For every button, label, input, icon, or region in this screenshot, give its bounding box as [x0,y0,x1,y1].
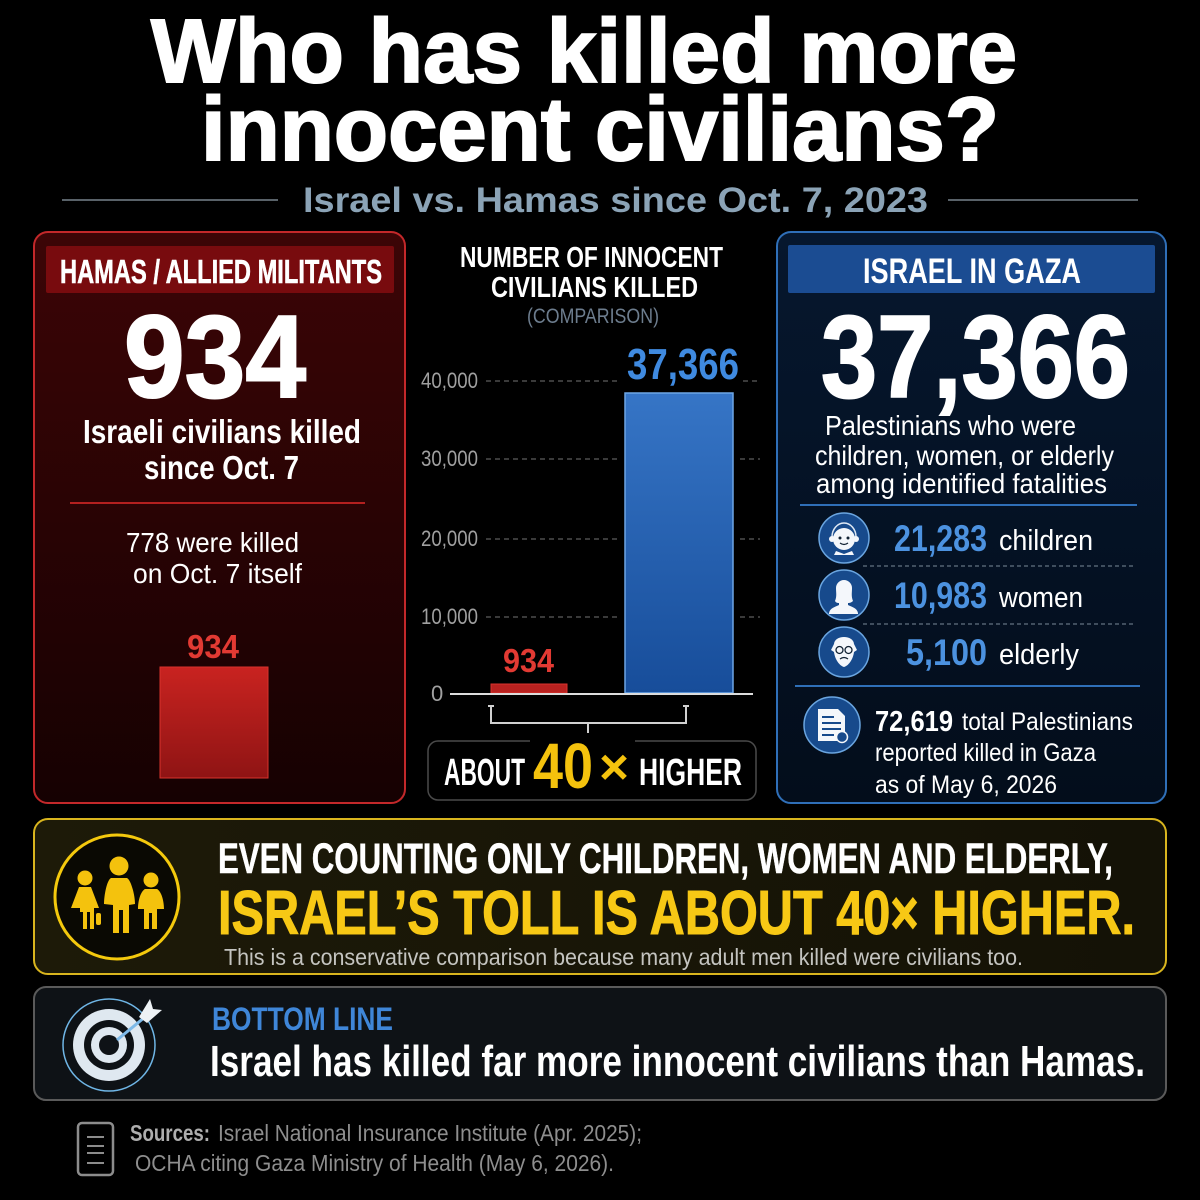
callout: about 40x higher: × [599,739,629,795]
icon: woman [819,570,869,620]
icon: child [819,513,869,563]
chart heading: (COMPARISON) [527,305,659,328]
callout: about 40x higher [428,730,756,802]
panel: Hamas / allied militants [34,232,405,803]
subtitle: Israel vs. Hamas since Oct. 7, 2023 [303,181,928,220]
stat: women: 10,983 [894,575,987,616]
bottom line text: BOTTOM LINE [212,1001,393,1037]
text: Palestinians description: children, women, or elderly [815,440,1114,471]
bar chart: 0 [431,681,443,706]
sources text [130,1120,642,1176]
text: 778 killed on Oct. 7: on Oct. 7 itself [133,558,302,589]
text: Israeli civilians killed: since Oct. 7 [144,449,299,486]
panel: yellow takeaway banner [34,819,1166,974]
stat: children [894,518,1093,559]
bar: Hamas 934: 934 [187,628,240,665]
text: total reported killed [875,706,1133,799]
big number: 934: 934 [124,291,306,422]
title: Who has killed more [151,2,1017,102]
icon: elderly person [819,627,869,677]
stat: women [894,575,1083,616]
panel: Israel in Gaza [777,232,1166,803]
text: 778 killed on Oct. 7: 778 were killed [126,527,299,558]
text: 778 killed on Oct. 7 [126,527,302,589]
bar chart: 20,000 [421,526,478,551]
bottom line text [210,1001,1145,1086]
bar chart: 37,366 [627,340,739,389]
headline text: This is a conservative comparison because many adult men killed were civilians too. [224,944,1023,970]
icon: family [55,835,179,959]
panel heading: Hamas: HAMAS / ALLIED MILITANTS [60,253,382,290]
stat: children: 21,283 [894,518,987,559]
text: Palestinians description: Palestinians who were [825,410,1076,441]
text: total reported killed: as of May 6, 2026 [875,771,1057,799]
stat: women: women [998,582,1083,614]
callout: about 40x higher: 40 [533,730,593,802]
stat: elderly: 5,100 [906,632,987,673]
chart heading [460,242,723,328]
panel heading: Israel [788,245,1155,293]
text: Israeli civilians killed: Israeli civilians killed [83,413,361,450]
icon: target with arrow [63,999,162,1091]
bracket [488,706,689,733]
chart heading: NUMBER OF INNOCENT [460,242,723,274]
callout: about 40x higher: HIGHER [639,752,742,794]
text: Palestinians description [815,410,1114,499]
title [151,2,1017,180]
sources text: Israel National Insurance Institute (Apr. 2025); [218,1120,642,1146]
stat: children: children [999,525,1093,557]
stat: elderly: elderly [999,639,1079,671]
text: total reported killed: reported killed in Gaza [875,739,1096,767]
bar: Hamas 934 [160,628,268,778]
chart heading: CIVILIANS KILLED [491,272,698,304]
callout: about 40x higher: ABOUT [444,752,525,794]
sources text: OCHA citing Gaza Ministry of Health (May 6, 2026). [135,1150,614,1176]
title: innocent civilians? [201,80,999,180]
bar chart: 40,000 [421,368,478,393]
big number: 37,366: 37,366 [821,291,1130,422]
text: Palestinians description: among identified fatalities [816,468,1107,499]
text: total reported killed: total Palestinians [962,708,1133,736]
bar chart: 30,000 [421,446,478,471]
icon: document [804,697,860,753]
sources text: Sources: [130,1120,210,1146]
panel heading: Hamas [46,246,394,293]
panel: comparison chart [421,242,760,802]
icon: sources document [78,1123,113,1175]
text: total reported killed: 72,619 [875,706,953,738]
bar chart: 10,000 [421,604,478,629]
headline text [218,835,1135,970]
bar chart: 934 [503,642,555,679]
stat: elderly [906,632,1079,673]
text: Israeli civilians killed [83,413,361,486]
panel: bottom line [34,987,1166,1100]
bar chart [421,340,760,706]
panel heading: Israel: ISRAEL IN GAZA [863,252,1081,291]
